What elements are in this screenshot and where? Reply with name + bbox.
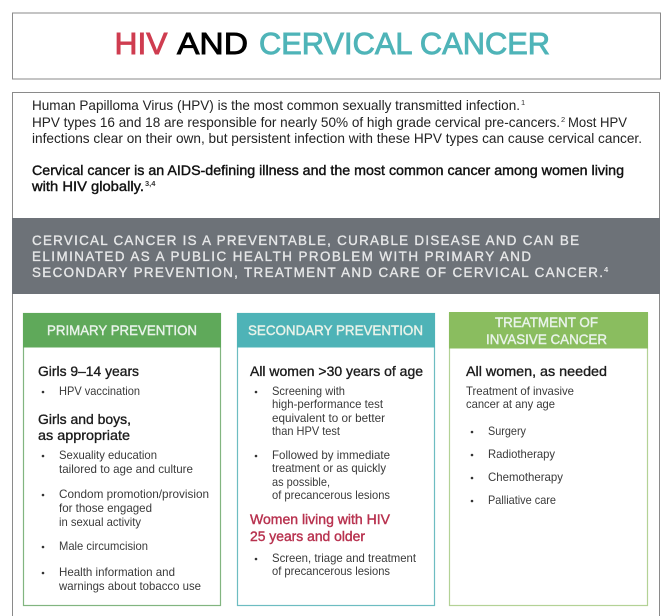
panel: treatment of invasive cancer: INVASIVE CANCER — [486, 332, 607, 347]
title: HIV — [114, 26, 168, 61]
panel: treatment of invasive cancer: Surgery — [488, 425, 526, 438]
intro text: Most HPV — [568, 115, 628, 130]
panel: primary prevention: for those engaged — [59, 502, 152, 515]
panel: secondary prevention: All women >30 years of age — [250, 363, 423, 379]
panel: primary prevention: Male circumcision — [59, 540, 148, 553]
panel: treatment of invasive cancer: All women, as needed — [466, 363, 607, 379]
panel: primary prevention: Girls and boys, — [38, 411, 131, 427]
grey banner — [12, 218, 660, 294]
panel: secondary prevention: SECONDARY PREVENTION — [248, 323, 423, 338]
panel: primary prevention: as appropriate — [38, 427, 130, 443]
bold statement: Cervical cancer is an AIDS-defining illness and the most common cancer among women living — [32, 163, 624, 178]
panel: secondary prevention — [237, 313, 435, 606]
panel: secondary prevention: of precancerous lesions — [272, 489, 390, 502]
title: CERVICAL CANCER — [259, 26, 550, 61]
bold statement: with HIV globally. — [31, 179, 144, 194]
panel: treatment of invasive cancer: Palliative care — [488, 494, 556, 507]
grey banner: SECONDARY PREVENTION, TREATMENT AND CARE OF CERVICAL CANCER. — [32, 265, 603, 280]
panel: treatment of invasive cancer: Treatment of invasive — [466, 385, 574, 398]
panel: primary prevention: warnings about tobacco use — [58, 580, 201, 593]
grey banner: ELIMINATED AS A PUBLIC HEALTH PROBLEM WITH PRIMARY AND — [32, 249, 531, 264]
panel: secondary prevention: Women living with HIV — [250, 511, 391, 527]
intro text: Human Papilloma Virus (HPV) is the most common sexually transmitted infection. — [32, 98, 520, 113]
panel: secondary prevention: Followed by immediate — [272, 449, 390, 462]
intro text — [32, 98, 642, 146]
panel: secondary prevention: equivalent to or better — [272, 412, 385, 425]
panel: primary prevention: Girls 9–14 years — [38, 363, 139, 379]
panel: primary prevention: PRIMARY PREVENTION — [47, 323, 197, 338]
title: AND — [177, 26, 248, 61]
panel: primary prevention: HPV vaccination — [59, 385, 140, 398]
panel: primary prevention: Sexuality education — [59, 449, 157, 462]
panel: treatment of invasive cancer: cancer at any age — [466, 398, 555, 411]
intro text: infections clear on their own, but persistent infection with these HPV types can cause cervical cancer. — [32, 131, 642, 146]
panel: treatment of invasive cancer: Chemotherapy — [488, 471, 563, 484]
grey banner: 4 — [604, 265, 609, 274]
title — [114, 26, 550, 61]
panel: treatment of invasive cancer: Radiotherapy — [488, 448, 555, 461]
intro text: HPV types 16 and 18 are responsible for nearly 50% of high grade cervical pre-cancers. — [32, 115, 560, 130]
panel: secondary prevention: treatment or as quickly — [272, 462, 386, 475]
title box — [12, 13, 660, 79]
panel: secondary prevention: Screen, triage and treatment — [272, 552, 417, 565]
panel: primary prevention: tailored to age and culture — [59, 463, 193, 476]
panel: secondary prevention: of precancerous lesions — [272, 565, 390, 578]
panel: secondary prevention: than HPV test — [272, 425, 341, 438]
intro text: 1 — [521, 98, 525, 107]
panel: primary prevention: Condom promotion/provision — [59, 488, 209, 501]
bold statement — [31, 163, 624, 194]
panel: primary prevention: in sexual activity — [59, 516, 141, 529]
panel: secondary prevention: high-performance test — [272, 398, 384, 411]
intro text: 2 — [561, 115, 565, 124]
grey banner: CERVICAL CANCER IS A PREVENTABLE, CURABLE DISEASE AND CAN BE — [32, 233, 579, 248]
panel: secondary prevention: 25 years and older — [250, 528, 365, 544]
bold statement: 3,4 — [145, 179, 156, 188]
panel: primary prevention: Health information and — [59, 566, 175, 579]
panel: secondary prevention: Screening with — [272, 385, 345, 398]
panel: secondary prevention: as possible, — [272, 476, 330, 489]
panel: treatment of invasive cancer — [449, 312, 648, 606]
panel: primary prevention — [23, 313, 221, 606]
panel: treatment of invasive cancer: TREATMENT OF — [495, 315, 598, 330]
